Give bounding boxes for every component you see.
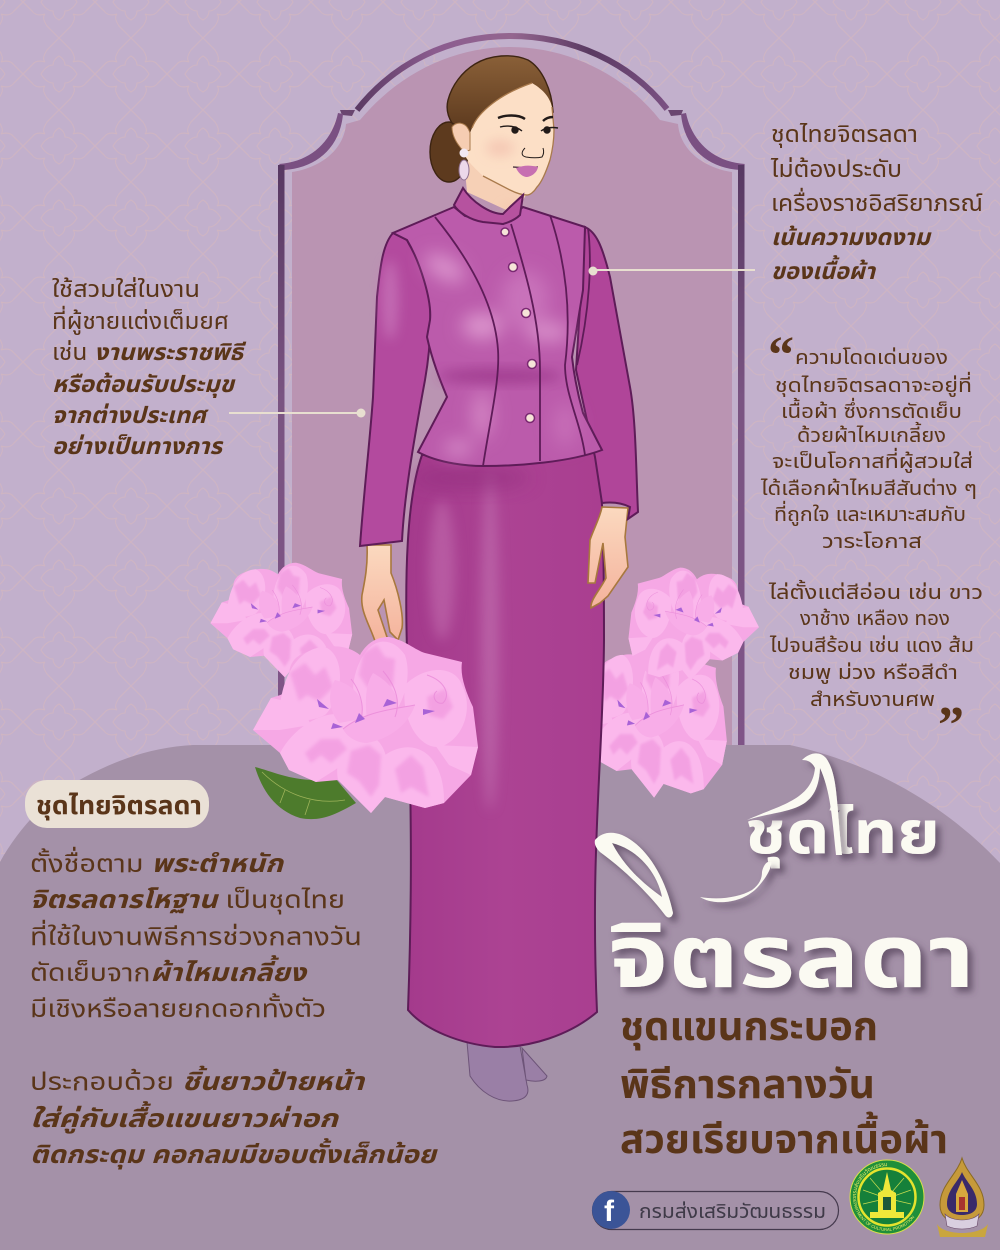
face <box>463 83 554 195</box>
text block: occasions: อย่างเป็นทางการ <box>52 433 224 459</box>
description text: มีเชิงหรือลายยกดอกทั้งตัว <box>30 992 326 1023</box>
right sleeve <box>576 227 638 519</box>
text block: no royal insignia: เน้นความงดงาม <box>771 224 932 250</box>
text block: occasions: ใช้สวมใส่ในงาน <box>52 276 200 302</box>
description text: ใส่คู่กับเสื้อแขนยาวผ่าอก <box>30 1101 340 1134</box>
bun <box>430 122 468 182</box>
neck <box>463 150 530 214</box>
earring <box>459 148 469 180</box>
text block: occasions <box>52 276 247 459</box>
quote block: เนื้อผ้า ซึ่งการตัดเย็บ <box>781 397 962 423</box>
shoes <box>467 1042 547 1101</box>
icon: facebook <box>592 1191 630 1229</box>
icon: facebook: f <box>604 1195 615 1228</box>
right hand <box>588 507 628 608</box>
big flower <box>253 637 478 813</box>
collar <box>454 188 523 224</box>
jacket highlights <box>420 247 577 455</box>
callout line left <box>229 408 366 418</box>
left sleeve highlight <box>382 260 398 340</box>
quote block <box>760 327 983 754</box>
waist shadow <box>438 368 562 384</box>
blush <box>486 140 522 214</box>
description text: จิตรลดารโหฐาน เป็นชุดไทย <box>30 886 345 915</box>
text block: no royal insignia: ของเนื้อผ้า <box>771 255 876 284</box>
flowers behind the figure on the right <box>574 568 759 798</box>
quote block: ไล่ตั้งแต่สีอ่อน เช่น ขาว <box>768 579 983 604</box>
figure in pink Thai Chitralada dress <box>360 56 638 1101</box>
quote block: วาระโอกาส <box>822 531 922 553</box>
text block: occasions: ที่ผู้ชายแต่งเต็มยศ <box>52 305 229 336</box>
subtitle <box>620 1005 948 1162</box>
quote block: ไปจนสีร้อน เช่น แดง ส้ม <box>769 634 974 657</box>
subtitle: พิธีการกลางวัน <box>620 1063 875 1107</box>
quote block: ที่ถูกใจ และเหมาะสมกับ <box>774 500 966 527</box>
arch frame panel <box>278 36 745 750</box>
title <box>595 753 975 1006</box>
quote block: งาช้าง เหลือง ทอง <box>800 607 950 630</box>
quote block: ชุดไทยจิตรลดาจะอยู่ที่ <box>775 371 972 398</box>
logo: department of cultural promotion: DEPARTMENT OF CULTURAL PROMOTION <box>853 1197 914 1231</box>
buttons <box>501 228 536 422</box>
label pill: ชุดไทยจิตรลดา <box>36 790 202 821</box>
jacket body <box>393 207 602 466</box>
description text: ติดกระดุม คอกลมมีขอบตั้งเล็กน้อย <box>30 1138 439 1170</box>
title: ชุดไทย <box>745 799 940 869</box>
logo: department of cultural promotion: กรมส่งเสริมวัฒนธรรม <box>853 1163 887 1197</box>
lips <box>516 166 538 177</box>
description text: ตั้งชื่อตาม พระตำหนัก <box>30 846 285 878</box>
text block: occasions: เช่น งานพระราชพิธี <box>52 339 247 365</box>
left sleeve <box>360 233 430 546</box>
flower top left <box>210 563 352 677</box>
logo: crest <box>937 1158 988 1237</box>
opening quote mark: “ <box>768 327 794 384</box>
description text: ที่ใช้ในงานพิธีการช่วงกลางวัน <box>30 919 362 951</box>
description text: ตัดเย็บจาก ผ้าไหมเกลี้ยง <box>30 955 308 987</box>
text block: occasions: จากต่างประเทศ <box>52 402 209 428</box>
text block: no royal insignia: เครื่องราชอิสริยาภรณ์ <box>771 187 983 216</box>
closing quote mark: ” <box>938 697 964 754</box>
skirt <box>406 450 604 1047</box>
quote block: จะเป็นโอกาสที่ผู้สวมใส่ <box>772 447 973 474</box>
quote block: ความโดดเด่นของ <box>795 346 948 369</box>
text block: no royal insignia <box>770 121 983 284</box>
subtitle: สวยเรียบจากเนื้อผ้า <box>620 1111 948 1162</box>
label pill <box>25 780 209 828</box>
leaf <box>255 767 356 819</box>
subtitle: ชุดแขนกระบอก <box>620 1005 878 1051</box>
brows eyes nose lips <box>498 116 558 167</box>
quote block: ชมพู ม่วง หรือสีดำ <box>788 661 958 685</box>
quote block: ด้วยผ้าไหมเกลี้ยง <box>797 421 946 447</box>
ground mound <box>0 745 1000 1250</box>
title swashes <box>595 753 842 917</box>
facebook pill <box>592 1191 838 1230</box>
logo: department of cultural promotion <box>850 1160 924 1234</box>
callout line right <box>588 266 755 276</box>
ear <box>452 123 470 151</box>
jaw and face outline <box>472 83 554 195</box>
description text <box>30 846 439 1170</box>
skirt sheen <box>410 466 530 810</box>
jacket seams <box>435 215 590 466</box>
text block: no royal insignia: ชุดไทยจิตรลดา <box>771 121 918 148</box>
text block: no royal insignia: ไม่ต้องประดับ <box>770 156 902 182</box>
hair <box>447 56 553 140</box>
facebook pill: กรมส่งเสริมวัฒนธรรม <box>639 1200 826 1223</box>
quote block: สำหรับงานศพ <box>810 689 935 711</box>
quote block: ได้เลือกผ้าไหมสีสันต่าง ๆ <box>760 477 977 500</box>
text block: occasions: หรือต้อนรับประมุข <box>52 371 237 398</box>
title: จิตรลดา <box>608 907 975 1006</box>
description text: ประกอบด้วย ชิ้นยาวป้ายหน้า <box>30 1066 365 1096</box>
left hand <box>362 545 402 644</box>
